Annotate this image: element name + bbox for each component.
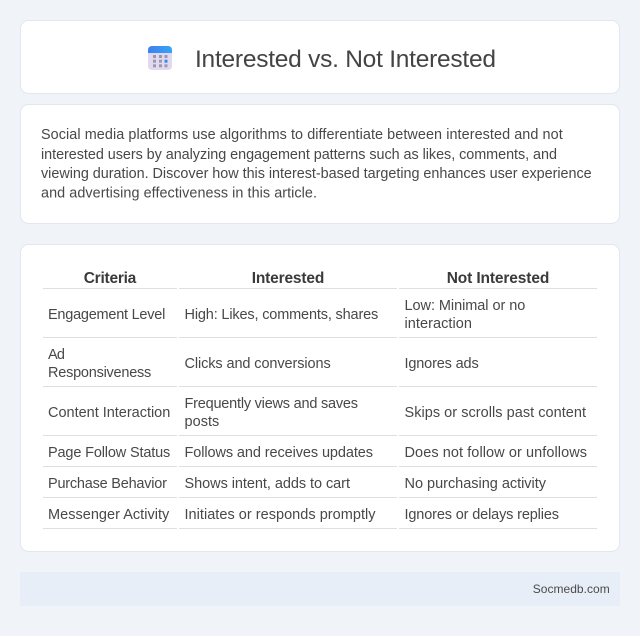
row: page follow status: Follows and receives updates <box>184 445 373 461</box>
row: ad responsiveness <box>48 347 479 381</box>
table header <box>84 270 549 287</box>
row: purchase behavior: No purchasing activity <box>404 476 547 492</box>
row: ad responsiveness: Ignores ads <box>404 356 479 372</box>
row: messenger activity: Ignores or delays replies <box>404 507 559 523</box>
row: page follow status: Does not follow or unfollows <box>404 445 587 461</box>
table header: Interested <box>252 270 324 287</box>
intro text <box>41 127 592 202</box>
row: content interaction: Skips or scrolls past content <box>404 405 586 421</box>
intro text: and advertising effectiveness in this article. <box>41 186 317 202</box>
row: page follow status <box>48 445 587 461</box>
row: content interaction: Content Interaction <box>48 405 170 421</box>
row: engagement level <box>48 298 525 332</box>
intro text: viewing duration. Discover how this interest-based targeting enhances user experience <box>41 166 592 182</box>
panel: intro paragraph <box>20 104 620 224</box>
row: content interaction <box>48 396 586 430</box>
row: content interaction: Frequently views and saves <box>184 396 358 412</box>
row: messenger activity: Messenger Activity <box>48 507 170 523</box>
row: content interaction: posts <box>184 414 219 430</box>
row: engagement level: Low: Minimal or no <box>404 298 525 314</box>
row: purchase behavior: Purchase Behavior <box>48 476 167 492</box>
title: Interested vs. Not Interested <box>195 46 496 73</box>
row: engagement level: interaction <box>404 316 472 332</box>
row: ad responsiveness: Clicks and conversions <box>184 356 331 372</box>
row: engagement level: High: Likes, comments, shares <box>184 307 378 323</box>
intro text: interested users by analyzing engagement patterns such as likes, comments, and <box>41 147 557 163</box>
row: ad responsiveness: Ad <box>48 347 65 363</box>
icon: calendar <box>148 46 172 70</box>
footer <box>20 572 620 606</box>
row: messenger activity: Initiates or responds promptly <box>184 507 376 523</box>
row: purchase behavior: Shows intent, adds to cart <box>184 476 350 492</box>
row: purchase behavior <box>48 476 547 492</box>
table header: Criteria <box>84 270 137 287</box>
row: page follow status: Page Follow Status <box>48 445 170 461</box>
intro text: Social media platforms use algorithms to differentiate between interested and not <box>41 127 563 143</box>
table header: Not Interested <box>447 270 549 287</box>
row: ad responsiveness: Responsiveness <box>48 365 151 381</box>
row: engagement level: Engagement Level <box>48 307 165 323</box>
footer source text: Socmedb.com <box>533 582 610 596</box>
row: messenger activity <box>48 507 559 523</box>
panel: title card <box>20 20 620 94</box>
panel: comparison table <box>20 244 620 552</box>
